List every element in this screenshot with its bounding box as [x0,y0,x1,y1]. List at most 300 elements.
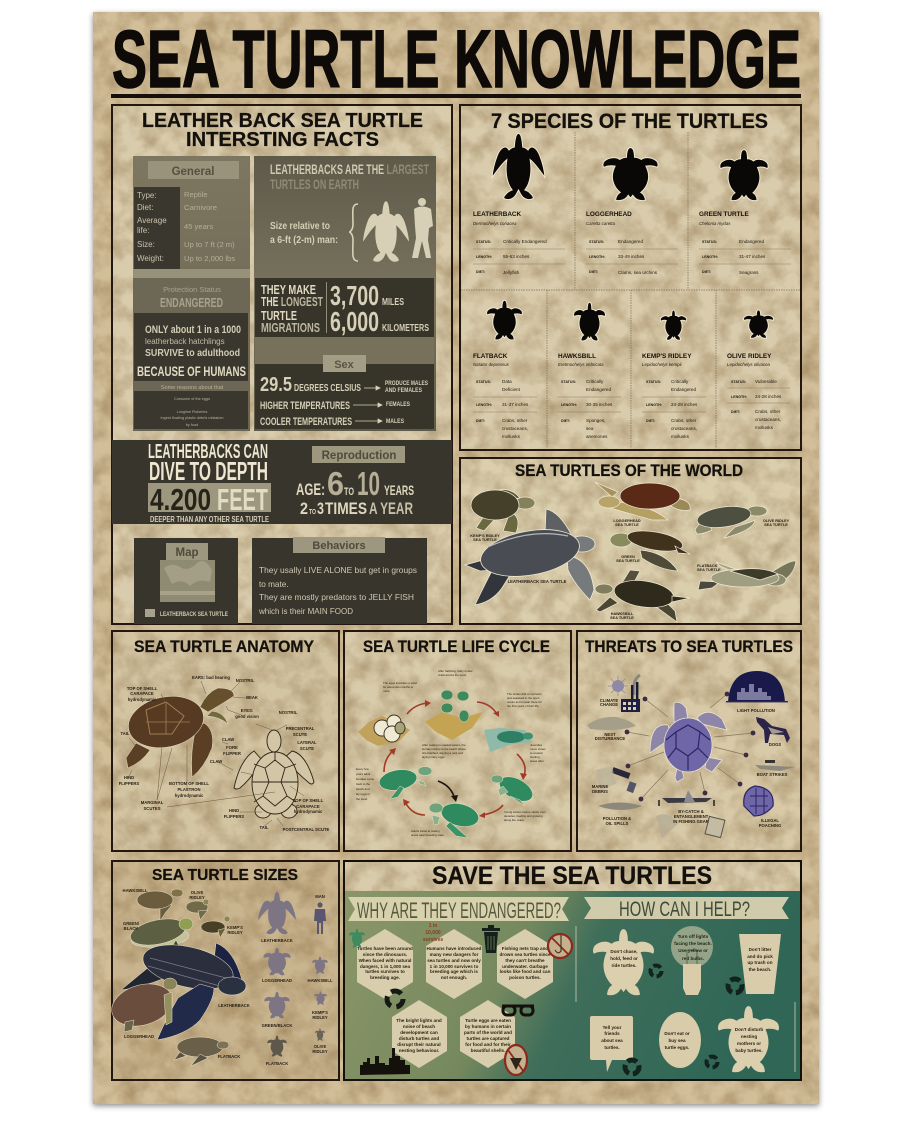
temperature and sex: MALES [386,419,404,425]
species: leatherback: LENGTH: [476,255,492,259]
olive ridley turtle [186,899,209,920]
anatomy labels: EARS: bad hearing [192,675,230,680]
panel heading: INTERSTING FACTS [186,129,379,151]
help shape: speech bubble: about sea [601,1038,623,1043]
cycle caption text: Adults travel to mating [411,829,440,833]
anatomy labels: EYES: [241,708,253,713]
anatomy labels: NOSTRIL [279,710,298,715]
icon: leatherback size silhouette [363,201,409,262]
species: green turtle: Endangered [739,239,764,244]
temperature and sex: DEGREES CELSIUS [294,383,361,394]
general facts column: 45 years [184,222,213,231]
help shape: cup: Don't litter [749,947,772,952]
migration stats: 3,700 [330,280,379,311]
help shape: egg [659,1012,701,1068]
general facts column: Carnivore [184,203,217,212]
species: flatback: STATUS: [476,380,491,384]
reasons list [134,382,248,429]
migration stats: MIGRATIONS [261,321,320,335]
species: leatherback: Dermochelys coriacea [473,221,517,226]
anatomy labels: TOP OF SHELL [293,798,324,803]
icon: no ice cream [505,1045,527,1075]
turtle: olive ridley: OLIVE RIDLEY [763,519,790,523]
anatomy labels: MARGINAL [141,800,164,805]
behaviors box: to mate. [259,580,289,589]
species: hawksbill: STATUS: [561,380,576,384]
anatomy labels: TAIL [120,731,130,736]
size labels: LOGGERHEAD [262,978,292,983]
temperature and sex: Sex [334,359,355,371]
panel heading: SEA TURTLE LIFE CYCLE [363,638,550,656]
turtle: green [610,527,690,571]
species: leatherback: STATUS: [476,240,491,244]
turtle: kemp's ridley [470,490,535,542]
largest turtles column [254,156,436,431]
threat: pollution and oil spills: POLLUTION & [603,816,631,821]
threat: illegal poaching: POACHING [759,823,781,828]
fact hexagon 1: Turtles have been around [357,946,413,951]
species: flatback: FLATBACK [473,353,508,360]
stage: juvenile turtle [491,772,537,806]
cycle caption text: crawl across the sand. [438,673,467,677]
size labels: FLATBACK [218,1054,240,1059]
stage: young turtle in water [484,728,533,752]
threat: light pollution [726,671,788,713]
species: loggerhead: LOGGERHEAD [586,211,632,218]
general facts column: Up to 7 ft (2 m) [184,240,235,249]
turtle: olive ridley: SEA TURTLE [764,523,788,527]
cycle caption text: more. [383,689,391,693]
panel: leatherback facts [107,105,801,1080]
turtle top outline diagram [234,730,314,818]
anatomy labels: FLIPPERS [119,781,139,786]
species: kemp's ridley: STATUS: [646,380,661,384]
fact hexagon 3: Fishing nets trap and [502,946,548,951]
temperature and sex: PRODUCE MALES [385,381,428,387]
turtle: loggerhead: SEA TURTLE [615,523,639,527]
stage: adult turtle [429,800,481,838]
species: kemp's ridley: DIET: [646,419,655,423]
hatchling survival text: SURVIVE to adulthood [145,348,240,359]
1 in 10,000 note [423,923,443,943]
species: leatherback [473,133,565,275]
help shape: turtle 2: Don't disturb [735,1027,763,1032]
species: kemp's ridley: crustaceans, [671,426,697,431]
dive depth text: DEEPER THAN ANY OTHER SEA TURTLE [150,514,269,524]
panel: threats [577,631,801,851]
size labels: LEATHERBACK [261,938,293,943]
anatomy labels: FORE [226,745,238,750]
species: olive ridley: STATUS: [731,380,746,384]
threat: nest disturbance: NEST [604,732,616,737]
size labels: RIDLEY [312,1015,328,1020]
protection status: ENDANGERED [160,295,223,310]
panel: sea turtles of the world [460,458,801,624]
temperature and sex: COOLER TEMPERATURES [260,416,352,428]
anatomy labels: BOTTOM OF SHELL [169,781,209,786]
species: hawksbill: HAWKSBILL [558,353,596,360]
help shape: cup: up trash on [747,960,773,965]
fact hexagon 3: looks like food and can [500,969,551,974]
species: kemp's ridley: Critically [671,379,689,384]
cycle caption text: move closer [530,747,546,751]
size labels: LEATHERBACK [218,1003,250,1008]
anatomy labels: SCUTE [300,746,314,751]
species: loggerhead [586,148,678,275]
help shape: turtle: Don't chase, [610,949,638,954]
loggerhead turtle [107,977,177,1033]
fact hexagon 4: development can [400,1030,438,1035]
help shape: speech bubble: friends [604,1031,620,1036]
cycle caption text: The eggs incubate in sand [383,681,417,685]
species: kemp's ridley [642,310,706,439]
ribbon: why endangered [348,897,569,923]
turtle: flatback [697,561,796,590]
help shape: light bulb: facing the beach. [674,941,712,946]
anatomy labels [119,675,330,832]
cycle caption text: years adult [356,772,370,776]
dive depth text: 4.200 [150,482,211,517]
1 in 10,000 note: 10,000 [425,930,441,936]
turtle: green: SEA TURTLE [616,559,640,563]
reproduction: TO [309,509,316,516]
size labels: HAWKSBILL [308,978,333,983]
turtle: hawksbill: SEA TURTLE [610,616,634,620]
species: leatherback: DIET: [476,270,485,274]
fact hexagon 4: disrupt their natural [397,1042,441,1047]
species: loggerhead: DIET: [589,270,598,274]
anatomy labels: FLIPPER [223,751,241,756]
1 in 10,000 note: survives [423,937,443,943]
species: olive ridley [727,310,790,430]
species: hawksbill [557,302,621,439]
fact hexagon 1: breeding age. [370,975,400,980]
threat: nest disturbance: DISTURBANCE [595,736,625,741]
species: flatback: Crabs, other [502,418,528,423]
help shape: egg: turtle eggs. [665,1045,689,1050]
general facts column: life: [137,226,149,235]
map legend: LEATHERBACK SEA TURTLE [160,611,229,618]
species: leatherback: Jellyfish [503,270,520,275]
general facts column: Type: [137,191,157,200]
help shape: turtle 2 [718,1006,779,1072]
species: leatherback: LEATHERBACK [473,211,522,218]
leatherback turtle [121,937,246,1040]
help shape: speech bubble: Tell your [603,1025,622,1030]
fact hexagon 4: noise of beach [403,1024,435,1029]
threat: nest disturbance [587,717,636,741]
fact hexagon 4: nesting behaviour. [399,1048,439,1053]
anatomy labels: SCUTE [293,732,307,737]
species: kemp's ridley: 24-28 inches [671,402,698,407]
fact hexagon 5: beautiful shells. [471,1048,505,1053]
help shape: speech bubble: turtles. [604,1045,620,1050]
panel heading: SEA TURTLE ANATOMY [134,638,314,656]
reproduction: YEARS [384,482,414,498]
dive depth text: LEATHERBACKS CAN [148,441,268,463]
threat: by-catch: BY-CATCH & [678,809,704,814]
cycle caption text: After hatching, baby turtles [438,669,473,673]
size labels: KEMP'S [312,1010,328,1015]
general facts column: General [172,166,214,178]
fact hexagon 4: disturb turtles and [399,1036,439,1041]
fact hexagon 2 [426,929,482,999]
anatomy labels: CARAPACE [130,691,154,696]
fact hexagon 5: Turtle eggs are eaten [465,1018,511,1023]
general facts column [133,156,250,431]
poster background [93,12,819,1104]
general facts column: Up to 2,000 lbs [184,254,235,263]
largest turtles column: a 6-ft (2-m) man: [270,235,338,246]
cycle caption text: Every few [356,767,370,771]
dive depth and reproduction band [112,440,452,524]
species: kemp's ridley: mollusks [671,434,690,439]
panel: sizes [107,861,339,1080]
species: olive ridley: 24-28 inches [755,394,782,399]
anatomy labels: BEAK [246,695,258,700]
species: loggerhead: Clams, sea urchins [618,270,658,275]
panel heading: LEATHER BACK SEA TURTLE [142,110,423,132]
size labels: OLIVE [314,1044,326,1049]
species: kemp's ridley: Endangered [671,387,696,392]
turtle: leatherback: LEATHERBACK SEA TURTLE [508,579,567,584]
general facts column: Size: [137,240,155,249]
world map [160,560,215,602]
species: loggerhead: LENGTH: [589,255,605,259]
reproduction: 10 [357,465,380,502]
icon: small green turtle [349,929,365,948]
migration stats: TURTLE [261,308,297,323]
general facts column: Average [137,216,167,225]
species: green turtle: GREEN TURTLE [699,211,749,218]
species: hawksbill: Critically [586,379,604,384]
fact hexagon 2: breeding age which is [430,969,478,974]
help shape: speech bubble [590,1016,633,1072]
protection status [133,278,250,313]
cycle caption text: the first years of their life. [507,704,539,708]
temperature and sex: FEMALES [386,402,410,408]
anatomy labels: good vision [235,714,259,719]
size labels: RIDLEY [189,895,205,900]
species: olive ridley: mollusks [755,425,774,430]
fact hexagon 1 [357,929,413,999]
size labels: RIDLEY [227,930,243,935]
general facts column: Diet: [137,203,153,212]
help shape: cup: the beach. [749,967,771,972]
fact hexagon 5: by humans in certain [465,1024,511,1029]
help shape: egg: Don't eat or [664,1031,690,1036]
cycle caption text: feeding [530,755,540,759]
size labels: BLACK [124,926,138,931]
cycle caption text: Juveniles [530,743,543,747]
anatomy labels: SCUTES [144,806,161,811]
species: loggerhead: 33-49 inches [618,254,645,259]
reasons list: Consume of the eggs [174,397,210,401]
species: olive ridley: crustaceans, [755,417,781,422]
species: flatback: LENGTH: [476,403,492,407]
fact hexagon 1: since the dinosaurs. [363,952,407,957]
species: olive ridley: Vulnerable [755,379,777,384]
largest turtles column: Size relative to [270,221,330,232]
fact hexagon 3: they can't breathe [505,958,545,963]
species: flatback: Deficient [502,387,521,392]
fact hexagon 3: poison turtles. [509,975,541,980]
anatomy labels: CARAPACE [296,804,320,809]
reproduction: AGE: [296,480,325,499]
general facts column: Reptile [184,190,208,199]
reasons list: by food [186,423,198,427]
fact hexagon 3: drown sea turtles since [499,952,551,957]
help shape: light bulb [671,926,713,995]
size labels: MAN [315,894,325,899]
help shape: cup: and do pick [747,954,773,959]
reproduction [296,446,414,518]
anatomy labels: LATERAL [297,740,317,745]
behaviors box [252,537,427,624]
hatchling survival text: ONLY about 1 in a 1000 [145,324,241,336]
species: hawksbill: Sponges, [586,418,605,423]
anatomy labels: TAIL [260,825,269,830]
reproduction: 6 [327,465,344,502]
anatomy leader lines [128,681,304,827]
behaviors box: which is their MAIN FOOD [258,607,353,616]
panel heading: SEA TURTLES OF THE WORLD [515,461,743,480]
species: green turtle: DIET: [702,270,711,274]
help shape: light bulb: Turn off lights [678,934,709,939]
species: flatback: Natator depressus [473,362,510,367]
threat spokes [625,692,755,801]
threat: marine debris: DEBRIS [592,789,608,794]
fact hexagon 1: turtles survives to [365,969,405,974]
bracket [349,204,358,261]
species: green turtle: STATUS: [702,240,717,244]
size labels: GREEN/BLACK [262,1023,292,1028]
behaviors box: They are mostly predators to JELLY FISH [259,593,414,602]
threat: marine debris: MARINE [592,784,608,789]
fact hexagon 5: for food and for their [465,1042,511,1047]
species: leatherback: 55-63 inches [503,254,530,259]
species: kemp's ridley: Lepidochelys kempii [642,362,683,367]
migration stats: MILES [382,297,404,308]
help shape: turtle: hold, feed or [610,956,638,961]
turtle: olive ridley [695,503,790,538]
reproduction: 3 [317,499,324,518]
migration stats: THEY MAKE [261,282,316,297]
size labels: FLATBACK [266,1061,288,1066]
anatomy labels: hydrodynamic [175,793,204,798]
reasons list: Some reasons about that [161,385,224,391]
species: hawksbill: 30-35 inches [586,402,613,407]
anatomy labels: HIND [229,808,239,813]
green turtle [128,914,193,950]
icon: city skyline [360,1048,410,1075]
size labels: RIDLEY [312,1049,328,1054]
help shape: turtle 2: mothers or [737,1041,761,1046]
title rule [111,94,801,98]
species: hawksbill: sea [586,426,594,431]
anatomy labels: HIND [124,775,134,780]
species: green turtle [699,150,791,275]
dive depth text: FEET [217,482,268,517]
size labels: OLIVE [191,890,203,895]
arrows [353,386,382,423]
anatomy labels: FLIPPERS [224,814,244,819]
cycle caption text: lay eggs in [356,792,370,796]
panel: 7 species [460,105,801,450]
threat: boat strikes [755,760,795,777]
illustrated turtle stack [107,889,246,1066]
turtle: leatherback [465,509,595,605]
cycle caption text: decades, feeding and growing [504,814,543,818]
size labels: HAWKSBILL [123,888,148,893]
threat: boat strikes: BOAT STRIKES [757,772,788,777]
fact hexagon 2: 1 in 10,000 survives to [430,964,479,969]
help shape: turtle 2: nesting [741,1034,757,1039]
size labels [123,888,333,1066]
reproduction: 2 [300,499,308,518]
species: green turtle: 31-47 inches [739,254,766,259]
stage: hatchlings [425,690,483,740]
size comparison silhouettes [258,892,328,1056]
central turtle [650,702,727,782]
threat: illegal poaching: ILLEGAL [761,818,779,823]
migration stats [255,278,434,337]
icon: trash can [482,925,500,953]
species: flatback: mollusks [502,434,521,439]
migration stats: 6,000 [330,306,379,337]
panel heading: THREATS TO SEA TURTLES [585,638,793,656]
kemp's ridley turtle [201,916,230,938]
turtle: loggerhead [595,482,690,527]
fact hexagon 4 [392,1000,447,1068]
reasons list: Longline Fisheries [177,410,208,414]
panel heading: SAVE THE SEA TURTLES [432,862,712,890]
threat: climate change [600,675,640,712]
map box [134,538,238,624]
species: hawksbill: Eretmochelys imbricata [558,362,604,367]
species: green turtle: LENGTH: [702,255,718,259]
hatchling survival text [134,313,248,381]
cycle caption text: she hatched, digging a nest and [422,751,463,755]
1 in 10,000 note: 1 in [429,923,437,929]
cycle caption text: female returns to the beach where [422,747,466,751]
fact hexagon 5: turtles are captured [467,1036,510,1041]
turtle: hawksbill [595,570,690,622]
help shape: turtle 2: baby turtles. [735,1048,763,1053]
largest turtles column: LEATHERBACKS ARE THE LARGEST [270,161,429,177]
panel heading: 7 SPECIES OF THE TURTLES [491,110,768,133]
threat: pollution and oil spills [598,802,642,826]
cycle caption text: The turtles drift on currents [507,692,542,696]
threat: by-catch [656,790,725,838]
fact hexagon 2: Humans have introduced [427,946,482,951]
stage: nesting turtle [378,766,432,799]
decorative side bars [576,926,795,1072]
fact hexagon 3: underwater. Garbage [502,964,548,969]
fact hexagon 5 [460,1000,515,1068]
threat: by-catch: ENTANGLEMENT [674,814,709,819]
turtle side illustration [124,688,234,777]
species: hawksbill: DIET: [561,419,570,423]
anatomy labels: hydrodynamic [128,697,157,702]
turtle: loggerhead: LOGGERHEAD [613,519,641,523]
turtle: kemp's ridley: KEMP'S RIDLEY [470,534,500,538]
help shape: light bulb: red bulbs. [682,956,704,961]
cycle caption text: laying many eggs. [422,755,445,759]
threat: light pollution: LIGHT POLLUTION [737,708,775,713]
species: hawksbill: Endangered [586,387,611,392]
icon: hands and globe [625,979,742,1074]
